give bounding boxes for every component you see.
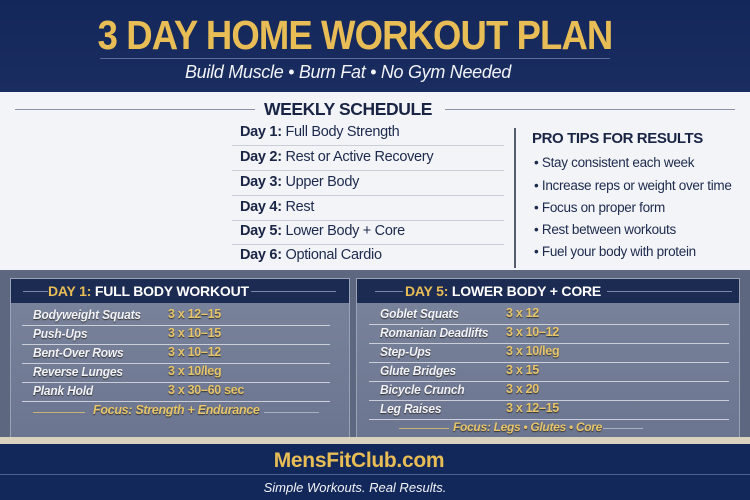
panel: day 5: DAY 5: LOWER BODY + CORE (405, 283, 601, 299)
panel: day 5: Focus: Legs • Glutes • Core (453, 420, 602, 434)
schedule list: Day 1: Full Body Strength (240, 124, 399, 140)
schedule list: Day 2: Rest or Active Recovery (240, 149, 433, 165)
workouts section background (0, 270, 750, 440)
pro tips: • Focus on proper form (534, 200, 665, 215)
panel: day 1: Bodyweight Squats (33, 307, 141, 322)
header band (0, 0, 750, 92)
schedule list (232, 124, 504, 263)
footer tagline: Simple Workouts. Real Results. (264, 480, 446, 495)
panel: day 5: Glute Bridges (380, 363, 456, 378)
panel: day 5: Step-Ups (380, 344, 431, 359)
panel: day 5: 3 x 20 (506, 382, 539, 396)
pro tips: PRO TIPS FOR RESULTS (532, 130, 703, 147)
panel: day 5: 3 x 10–12 (506, 325, 559, 339)
pro tips: • Increase reps or weight over time (534, 178, 732, 193)
schedule list: Day 4: Rest (240, 199, 314, 215)
pro tips (532, 130, 732, 259)
panel: day 1: Reverse Lunges (33, 364, 123, 379)
panel: day 5: Leg Raises (380, 401, 441, 416)
panel: day 5: Romanian Deadlifts (380, 325, 488, 340)
footer brand: MensFitClub.com (274, 449, 444, 472)
panel: day 5: 3 x 10/leg (506, 344, 559, 358)
panel: day 5: Goblet Squats (380, 306, 459, 321)
panel: day 1: Bent-Over Rows (33, 345, 123, 360)
panel: day 5: 3 x 15 (506, 363, 539, 377)
subtitle: Build Muscle • Burn Fat • No Gym Needed (185, 62, 511, 82)
weekly schedule heading: WEEKLY SCHEDULE (264, 99, 432, 119)
schedule list: Day 6: Optional Cardio (240, 247, 382, 263)
panel: day 1: 3 x 12–15 (168, 307, 221, 321)
pro tips: • Stay consistent each week (534, 155, 694, 170)
pro tips: • Fuel your body with protein (534, 244, 696, 259)
panel: day 5: 3 x 12 (506, 306, 539, 320)
schedule list: Day 3: Upper Body (240, 174, 359, 190)
panel: day 1: 3 x 10/leg (168, 364, 221, 378)
panel: day 5: Bicycle Crunch (380, 382, 464, 397)
panel: day 1: 3 x 10–15 (168, 326, 221, 340)
pro tips: • Rest between workouts (534, 222, 676, 237)
panel: day 1: 3 x 30–60 sec (168, 383, 244, 397)
panel: day 1: DAY 1: FULL BODY WORKOUT (48, 283, 249, 299)
title: 3 DAY HOME WORKOUT PLAN (98, 12, 612, 58)
panel: day 1 (10, 278, 350, 438)
panel: day 1: Focus: Strength + Endurance (93, 403, 260, 417)
panel: day 5: 3 x 12–15 (506, 401, 559, 415)
panel: day 1: Push-Ups (33, 326, 87, 341)
schedule list: Day 5: Lower Body + Core (240, 223, 405, 239)
footer (0, 437, 750, 500)
panel: day 5 (356, 278, 740, 438)
panel: day 1: Plank Hold (33, 383, 93, 398)
panel: day 1: 3 x 10–12 (168, 345, 221, 359)
